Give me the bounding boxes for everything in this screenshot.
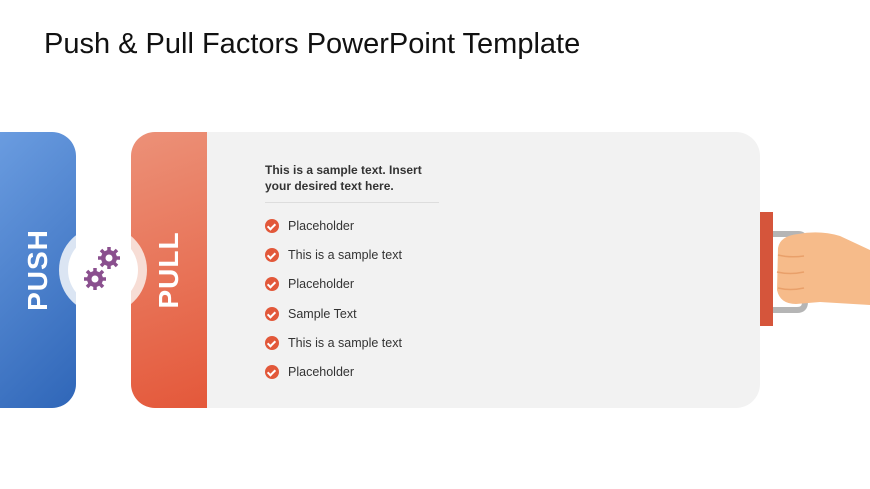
text block: heading: your desired text here.	[265, 179, 394, 193]
list item 5	[265, 336, 402, 350]
panel: pull	[131, 132, 760, 408]
list item 4	[265, 307, 357, 321]
pull orange band	[131, 132, 207, 408]
icon: hand pulling handle	[760, 212, 870, 326]
list: This is a sample text	[288, 336, 402, 350]
text block: heading	[265, 163, 422, 193]
list: This is a sample text	[288, 248, 402, 262]
list item 1	[265, 219, 354, 233]
list	[265, 219, 402, 379]
text block: heading: This is a sample text. Insert	[265, 163, 422, 177]
title: Push & Pull Factors PowerPoint Template	[44, 28, 580, 60]
list item 6	[265, 365, 354, 379]
panel: push	[0, 132, 76, 408]
list: Placeholder	[288, 219, 354, 233]
list item 2	[265, 248, 402, 262]
list: Sample Text	[288, 307, 357, 321]
icon: gears	[84, 247, 120, 290]
pull label: PULL	[153, 231, 184, 309]
connector circle	[59, 235, 147, 305]
push label: PUSH	[22, 229, 53, 311]
list: Placeholder	[288, 365, 354, 379]
list: Placeholder	[288, 277, 354, 291]
list item 3	[265, 277, 354, 291]
